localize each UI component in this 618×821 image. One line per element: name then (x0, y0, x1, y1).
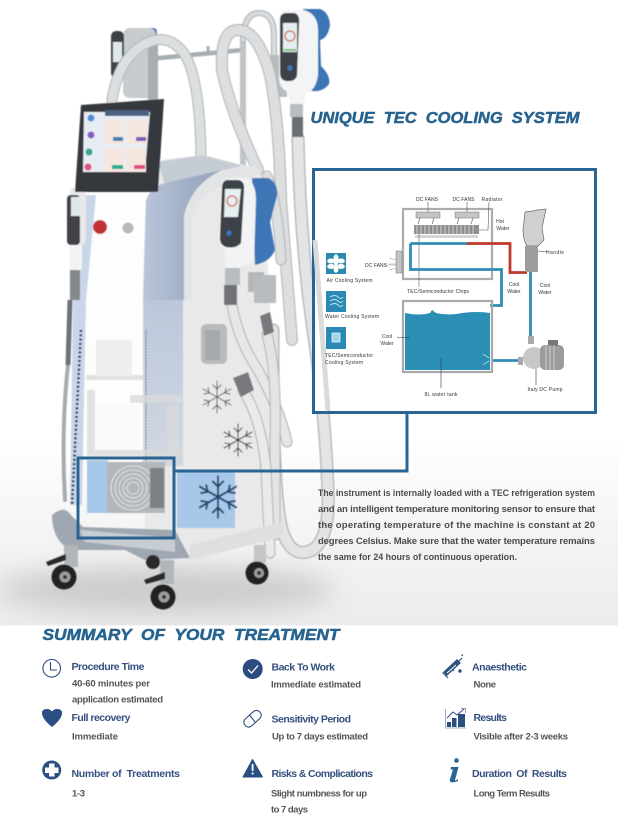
heading: summary of your treatment: SUMMARY OF YOUR TREATMENT (42, 627, 341, 644)
item: anaesthetic: None (474, 680, 496, 690)
diagram labels: Water (538, 290, 552, 296)
item: back to work (243, 659, 361, 690)
icon: warning triangle (243, 760, 262, 777)
diagram labels: DC FANS (452, 197, 475, 203)
diagram labels: Hot (496, 219, 505, 225)
diagram labels: TEC/Semiconductor Chips (407, 289, 470, 295)
item: duration of results: Duration Of Results (472, 768, 567, 780)
icon: syringe (442, 654, 463, 678)
description paragraph: the operating temperature of the machine is constant at 20 (318, 520, 595, 531)
base and casters (46, 510, 283, 610)
description paragraph (318, 488, 596, 563)
rear left handpiece (111, 28, 158, 100)
item: procedure time: 40-60 minutes per (72, 678, 150, 690)
rear rack and posts (128, 13, 287, 169)
item: number of treatments (42, 760, 180, 800)
hose arch left (112, 40, 201, 157)
callout connector from cooling module to diagram (78, 413, 407, 538)
emergency stop and key switch (93, 220, 134, 234)
hose arch right (222, 30, 292, 340)
label: TEC semiconductor cooling system: TEC/Semiconductor (325, 353, 373, 359)
diagram labels: Italy DC Pump (528, 387, 563, 393)
machine body rear (145, 155, 278, 561)
diagram labels: Radiator (482, 197, 503, 203)
diagram labels (365, 197, 564, 398)
item: risks and complications: Slight numbness for up (271, 788, 367, 800)
item: back to work: Back To Work (272, 662, 335, 674)
item: anaesthetic: Anaesthetic (472, 662, 527, 674)
description paragraph: and an intelligent temperature monitoring sensor to ensure that (318, 504, 596, 515)
icon: rising bar chart (446, 708, 466, 728)
white lower section (0, 626, 618, 821)
gel cartridge holder (201, 324, 227, 364)
item: full recovery (42, 709, 131, 742)
label: water cooling system: Water Cooling System (325, 314, 379, 320)
item: risks and complications: Risks & Complications (272, 768, 373, 780)
item: results: Visible after 2-3 weeks (474, 732, 568, 742)
diagram labels: Cool (540, 283, 550, 289)
top handpiece (279, 9, 330, 137)
item: risks and complications: to 7 days (271, 804, 308, 816)
item: full recovery: Immediate (72, 732, 118, 742)
water tank (397, 301, 492, 388)
item: procedure time: application estimated (72, 694, 163, 706)
item: back to work: Immediate estimated (271, 680, 361, 690)
radiator enclosure (403, 202, 492, 287)
decorative hose behind panel (315, 240, 328, 411)
diagram labels: Cool (382, 334, 392, 340)
cooling module blue blocks (87, 460, 235, 528)
item: procedure time (43, 660, 163, 706)
machine illustration (46, 9, 330, 610)
touch screen (75, 99, 164, 192)
item: sensitivity period: Up to 7 days estimated (272, 732, 368, 742)
item: risks and complications (243, 760, 373, 816)
icon: info letter i (450, 758, 459, 782)
front white panel (70, 195, 146, 505)
diagram labels: 8L water tank (424, 392, 458, 398)
icon: air cooling (326, 253, 346, 274)
item: results (446, 708, 568, 742)
label: TEC semiconductor cooling system (325, 353, 373, 366)
icon: water cooling (326, 291, 346, 312)
water pipes (410, 244, 530, 360)
water pump (518, 336, 564, 385)
inner frame shelves (86, 340, 183, 456)
item: full recovery: Full recovery (72, 712, 131, 724)
snowflakes (200, 381, 252, 518)
item: number of treatments: 1-3 (72, 788, 85, 800)
front handpiece hoses (232, 305, 287, 553)
handle (523, 209, 548, 272)
body side panel (142, 170, 222, 500)
item: number of treatments: Number of Treatments (72, 768, 180, 780)
description paragraph: the same for 24 hours of continuous operation. (318, 552, 517, 563)
item: duration of results: Long Term Results (474, 788, 550, 800)
icon: pill (242, 709, 263, 729)
diagram labels: Water (496, 226, 510, 232)
top handpiece hose (273, 138, 328, 552)
item: sensitivity period (242, 709, 368, 742)
icon: heart (42, 709, 62, 727)
label: air cooling system: Air Cooling System (326, 278, 372, 284)
description paragraph: degrees Celsius. Make sure that the water temperature remains (318, 536, 595, 547)
panel: cooling system diagram (314, 170, 596, 412)
item: procedure time: Procedure Time (72, 661, 145, 673)
diagram labels: Water (507, 289, 521, 295)
side DC fan (385, 251, 402, 273)
background floor shadow (0, 440, 618, 626)
icon: check badge (243, 659, 263, 679)
item: anaesthetic (442, 654, 527, 690)
diagram labels: DC FANS (365, 263, 388, 269)
icon: medical cross (42, 760, 61, 780)
title: unique TEC cooling system: UNIQUE TEC COOLING SYSTEM (310, 110, 580, 127)
diagram labels: Cool (509, 282, 519, 288)
left handpiece (64, 187, 86, 500)
diagram labels: Water (380, 341, 394, 347)
item: sensitivity period: Sensitivity Period (272, 714, 351, 726)
middle handpiece (219, 178, 277, 305)
item: duration of results (450, 758, 567, 800)
item: results: Results (474, 712, 507, 724)
label: TEC semiconductor cooling system: Cooling System (325, 360, 363, 366)
icon: clock (43, 660, 60, 677)
icon: semiconductor chip (326, 327, 346, 349)
description paragraph: The instrument is internally loaded with a TEC refrigeration system (318, 488, 595, 499)
diagram labels: DC FANS (416, 197, 439, 203)
diagram labels: Handle (546, 250, 564, 256)
